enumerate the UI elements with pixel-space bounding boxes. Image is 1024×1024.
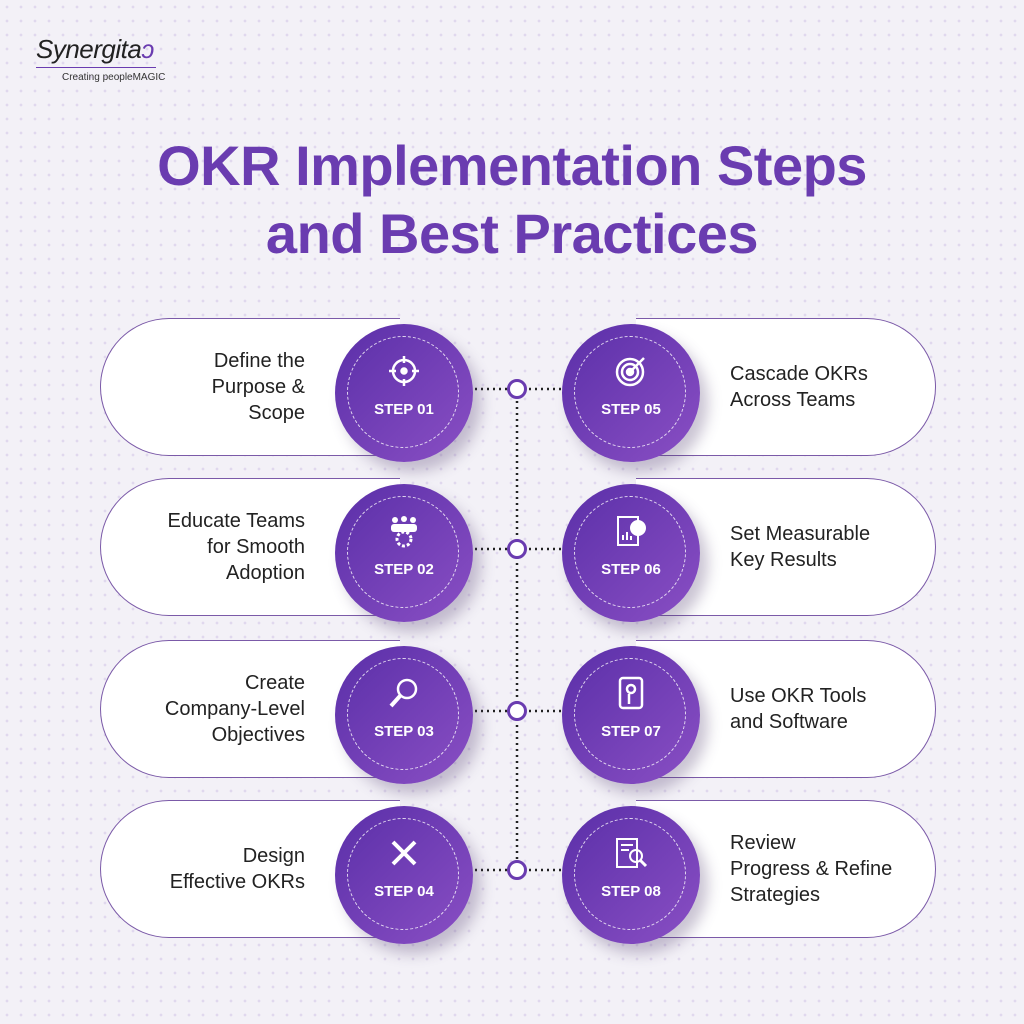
title: OKR Implementation Steps: [157, 134, 867, 197]
step 01: STEP 01: [374, 401, 434, 418]
step 08: Review: [730, 832, 796, 854]
step 01: [100, 318, 488, 479]
step 02: for Smooth: [207, 536, 305, 558]
step 08: [562, 800, 936, 961]
step 05: Cascade OKRs: [730, 363, 868, 385]
step 04: [100, 800, 488, 961]
step 06: STEP 06: [601, 561, 661, 578]
step 03: Create: [245, 672, 305, 694]
step 03: STEP 03: [374, 723, 434, 740]
step 02: Adoption: [226, 562, 305, 584]
step 01: Scope: [248, 402, 305, 424]
step 08: STEP 08: [601, 883, 661, 900]
step 07: [562, 640, 936, 801]
step 07: and Software: [730, 711, 848, 733]
step 01: Define the: [214, 350, 305, 372]
step 06: Set Measurable: [730, 523, 870, 545]
logo: [36, 34, 165, 83]
step 03: Objectives: [212, 724, 305, 746]
step 03: Company-Level: [165, 698, 305, 720]
step 04: STEP 04: [374, 883, 434, 900]
step 06: [562, 478, 936, 639]
step 07: STEP 07: [601, 723, 661, 740]
step 08: Strategies: [730, 884, 820, 906]
logo: Synergitaↄ: [36, 34, 154, 64]
step 02: [100, 478, 488, 639]
step 05: STEP 05: [601, 401, 661, 418]
step 07: Use OKR Tools: [730, 685, 866, 707]
step 02: Educate Teams: [168, 510, 305, 532]
step 06: Key Results: [730, 549, 837, 571]
step 05: [562, 318, 936, 479]
logo: Creating peopleMAGIC: [62, 72, 165, 83]
title: and Best Practices: [266, 202, 758, 265]
nodes: [507, 379, 527, 880]
step 04: Design: [243, 845, 305, 867]
step 02: STEP 02: [374, 561, 434, 578]
title: [157, 134, 867, 265]
step 04: Effective OKRs: [170, 871, 305, 893]
step 01: Purpose &: [212, 376, 305, 398]
step 05: Across Teams: [730, 389, 855, 411]
step 08: Progress & Refine: [730, 858, 892, 880]
step 03: [100, 640, 488, 801]
